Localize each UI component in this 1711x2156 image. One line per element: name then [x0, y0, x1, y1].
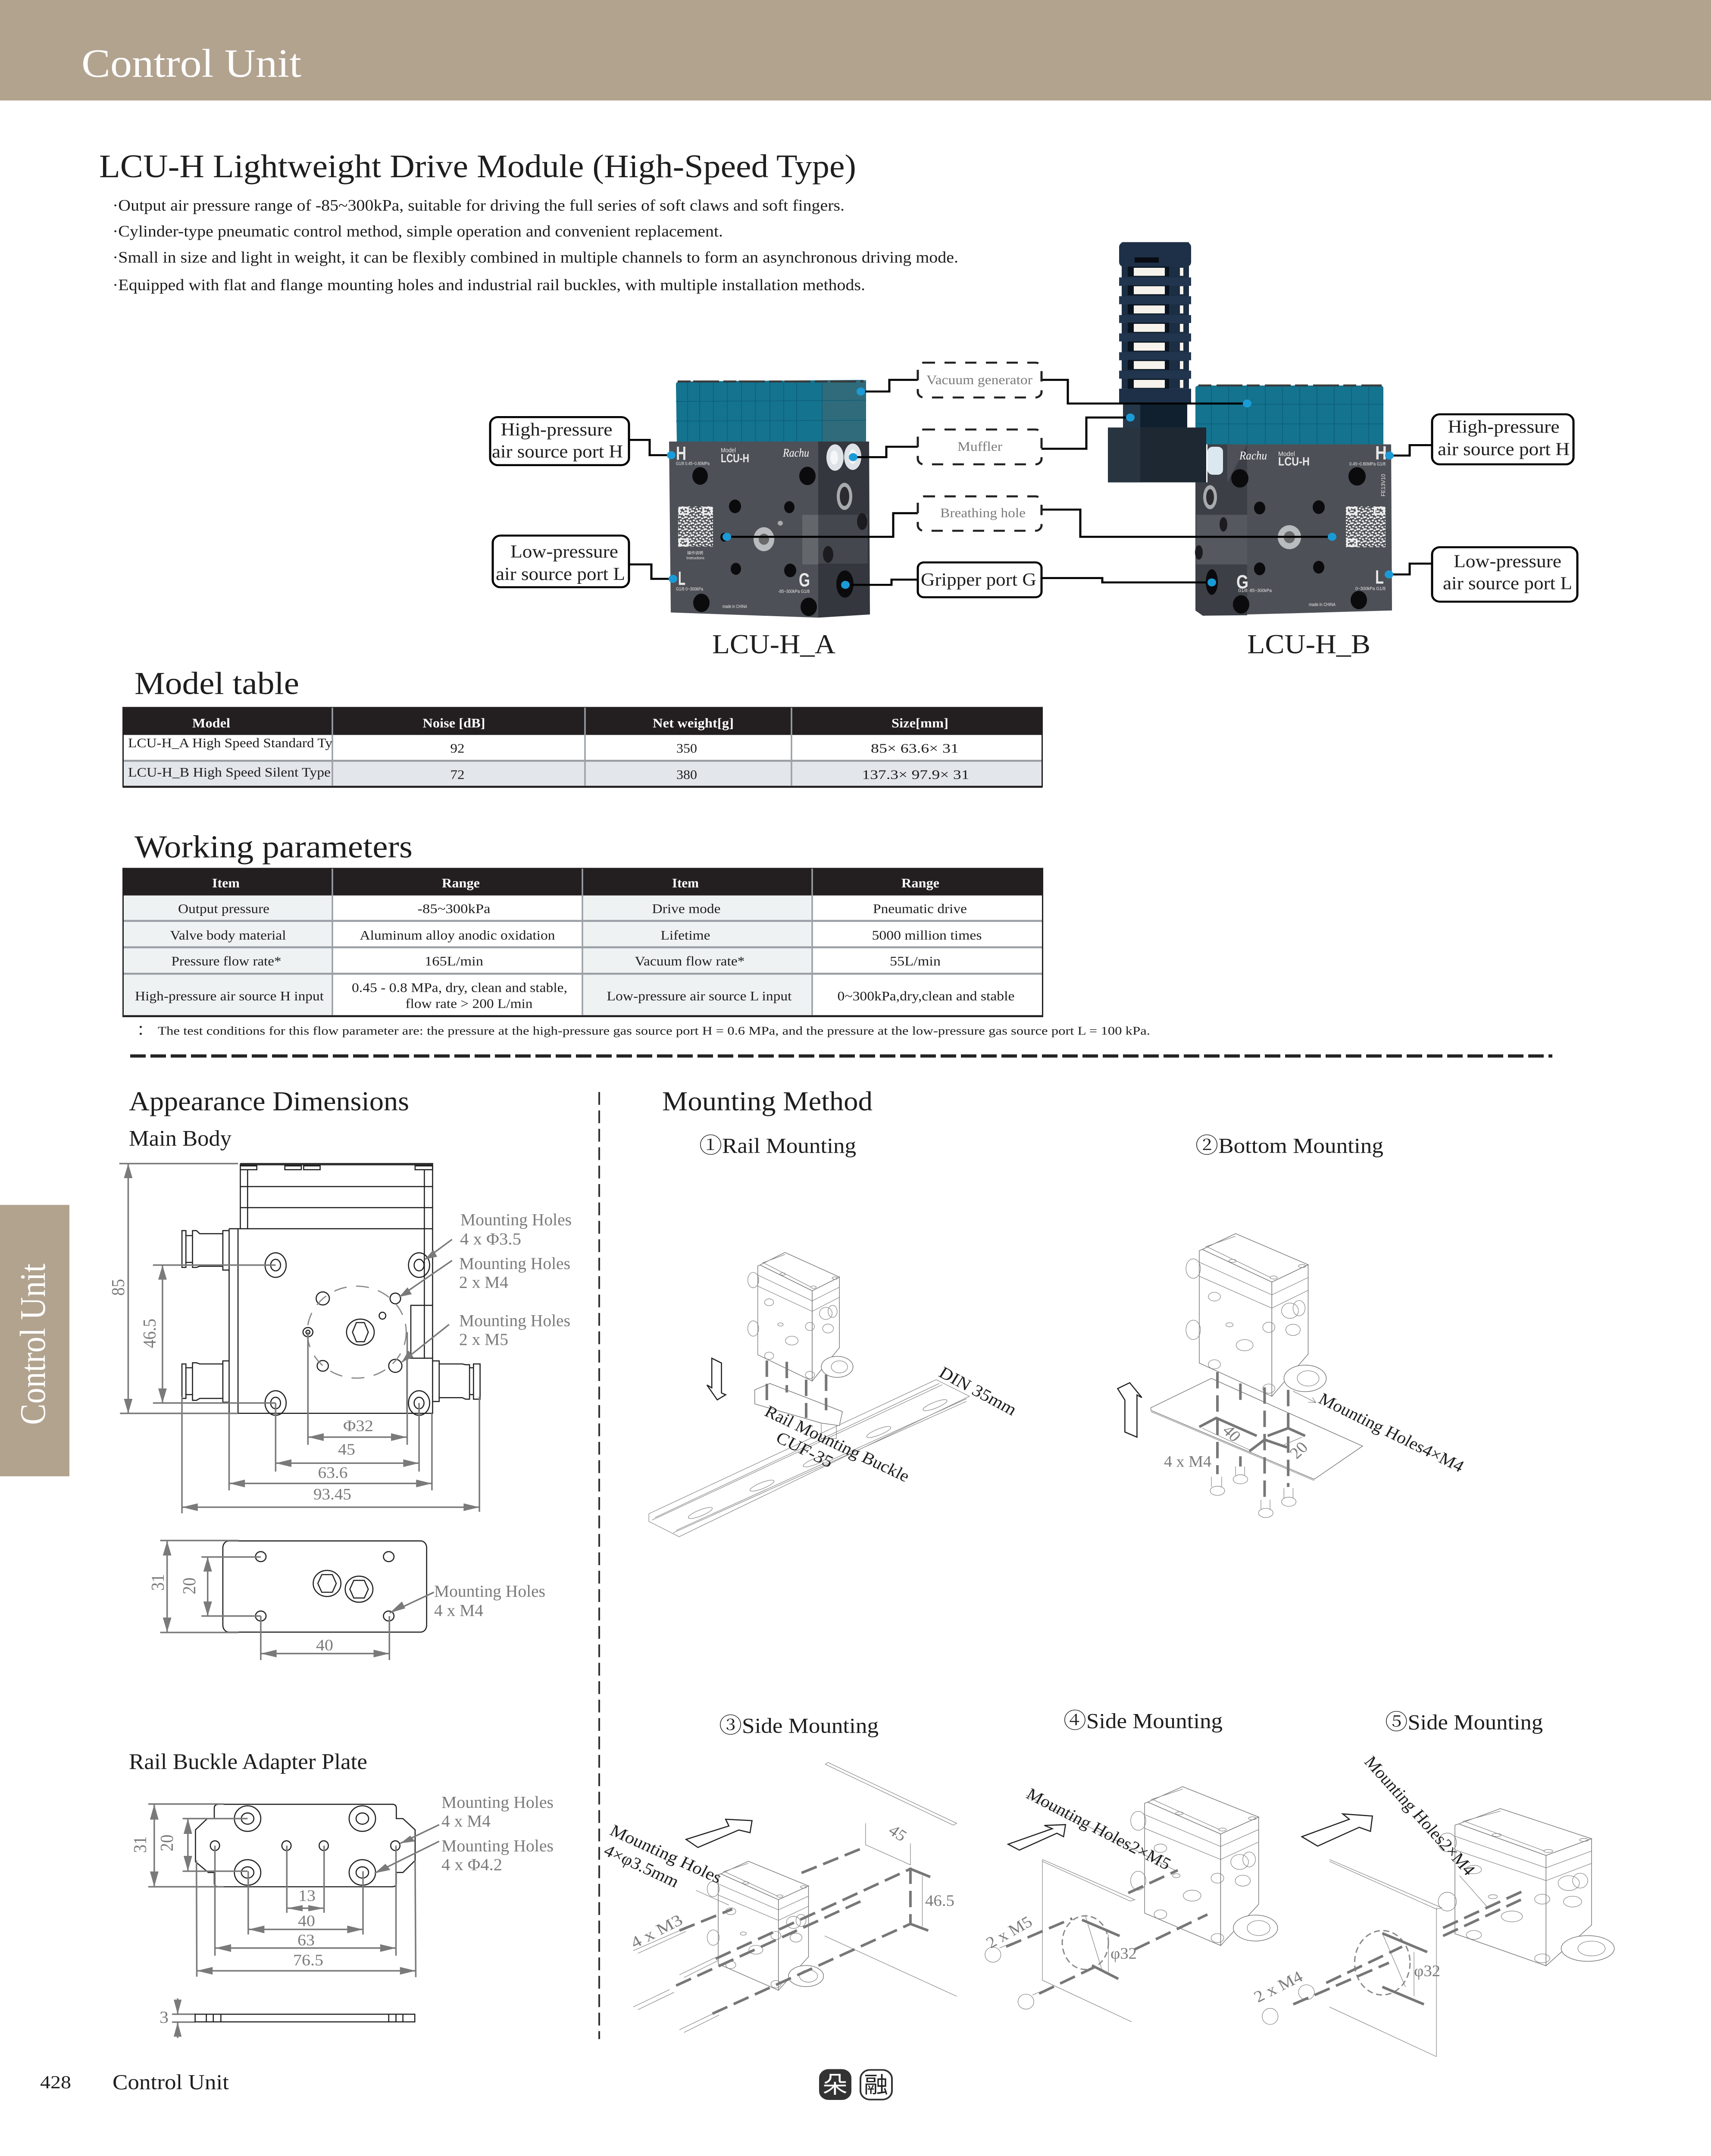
- row: output pressure: [178, 902, 967, 916]
- arrow: push in: [1008, 1825, 1066, 1850]
- drawing: main body front view: 45: [338, 1441, 355, 1458]
- feature list: [113, 197, 958, 294]
- arrow: push in: [686, 1819, 752, 1847]
- drawing: main body front view: Mounting Holes: [460, 1210, 572, 1229]
- page number: 428: [40, 2072, 71, 2093]
- product photo: LCU-H_B with muffler: 0~300kPa G1/8: [1355, 586, 1386, 591]
- product photo: LCU-H_A: [669, 380, 870, 617]
- callout: low-pressure port L (B): Low-pressure: [1454, 551, 1561, 571]
- side tab label: Control Unit: [13, 1263, 53, 1425]
- heading: side mounting 4: ④Side Mounting: [1064, 1709, 1223, 1733]
- product photo: LCU-H_B with muffler: [1108, 242, 1392, 616]
- footer logo: 融: [864, 2067, 888, 2100]
- diagram: side mounting 3: 45: [885, 1821, 910, 1845]
- footer logo: [819, 2066, 892, 2100]
- product title: LCU-H Lightweight Drive Module (High-Speed Type): [99, 149, 856, 185]
- side tab: [0, 1205, 69, 1476]
- product photo: LCU-H_A: G1/8 0~300kPa: [676, 587, 703, 592]
- product photo: LCU-H_B with muffler: H: [1375, 442, 1387, 464]
- row: LCU-H_A: [128, 736, 959, 755]
- diagram: side mounting 4: φ32: [1110, 1945, 1137, 1962]
- heading: rail buckle adapter plate: Rail Buckle Adapter Plate: [129, 1749, 367, 1774]
- diagram: rail mounting: [649, 1253, 1020, 1537]
- header row: [212, 876, 939, 890]
- product photo: LCU-H_B with muffler: FE13V10: [1380, 474, 1386, 496]
- working parameters table: [122, 868, 1043, 1017]
- drawing: rail buckle adapter plate: 31: [130, 1836, 150, 1853]
- product photo: LCU-H_A: G1/8 0.45~0.80MPa: [676, 461, 710, 467]
- row: flow rate: 165L/min: [425, 954, 483, 968]
- callout: vacuum generator: Vacuum generator: [926, 373, 1032, 387]
- callout: high-pressure port H (A): [490, 417, 671, 465]
- diagram: bottom mounting: 20: [1286, 1438, 1312, 1462]
- product photo: LCU-H_B with muffler: G1/8 -85~300kPa: [1238, 588, 1272, 593]
- drawing: main body front view: 46.5: [140, 1319, 160, 1348]
- row: LCU-H_A: 92: [450, 741, 465, 755]
- arrow: move down: [707, 1358, 726, 1400]
- product photo: LCU-H_B with muffler: Model: [1278, 451, 1295, 458]
- row: air source input: Low-pressure air source L input: [607, 989, 792, 1003]
- heading: working parameters: Working parameters: [135, 829, 413, 865]
- arrow: move up: [1118, 1383, 1142, 1437]
- row: flow rate: 55L/min: [890, 954, 941, 968]
- callout: high-pressure port H (A): High-pressure: [501, 419, 612, 440]
- row: air source input: High-pressure air source H input: [135, 989, 324, 1003]
- drawing: main body front view: 63.6: [318, 1464, 348, 1482]
- diagram: side mounting 3: 46.5: [925, 1892, 954, 1909]
- row: LCU-H_B: LCU-H_B High Speed Silent Type: [128, 765, 331, 780]
- diagram: side mounting 3: 4 x M3: [627, 1911, 686, 1952]
- product photo: LCU-H_A: made in CHINA: [723, 604, 747, 609]
- drawing: rail buckle adapter plate: 63: [297, 1932, 315, 1949]
- drawing: rail buckle adapter plate: 76.5: [293, 1952, 323, 1969]
- row: air source input: 0~300kPa,dry,clean and stable: [838, 989, 1015, 1003]
- header row: Model: [192, 716, 230, 730]
- callout: low-pressure port L (B): air source port L: [1443, 573, 1572, 593]
- product photo: LCU-H_A: G: [799, 569, 810, 591]
- row: LCU-H_B: [128, 765, 970, 782]
- drawing: rail buckle adapter plate: Mounting Holes: [441, 1836, 554, 1855]
- feature list: ·Cylinder-type pneumatic control method, simple operation and convenient replacement.: [113, 223, 723, 240]
- label: LCU-H_A: LCU-H_A: [712, 630, 835, 659]
- header row: [192, 716, 948, 730]
- row: output pressure: Pneumatic drive: [873, 902, 967, 916]
- drawing: rail buckle adapter plate: Mounting Holes: [441, 1793, 554, 1811]
- port marker dots: [667, 388, 1394, 589]
- drawing: main body front view: Mounting Holes: [459, 1311, 570, 1330]
- drawing: main body front view: 2 x M5: [459, 1330, 508, 1349]
- header row: Item: [672, 876, 699, 890]
- diagram: side mounting 3: Mounting Holes: [607, 1821, 725, 1887]
- footnote: [137, 1019, 1150, 1039]
- diagram: bottom mounting: [1118, 1234, 1467, 1517]
- drawing: main body front view: 85: [108, 1279, 128, 1296]
- model table: [122, 707, 1043, 788]
- callout: high-pressure port H (A): air source port H: [492, 441, 623, 462]
- drawing: rail buckle adapter plate: [130, 1793, 554, 2038]
- diagram: side mounting 3: [601, 1762, 957, 2033]
- row: valve body: Aluminum alloy anodic oxidation: [360, 928, 555, 943]
- callout: muffler: [853, 417, 1130, 464]
- callout: muffler: Muffler: [957, 439, 1002, 454]
- footer section name: Control Unit: [113, 2071, 229, 2094]
- product photo: LCU-H_A: L: [678, 567, 685, 589]
- drawing: main body bottom view: [148, 1541, 545, 1660]
- product photo: LCU-H_B with muffler: G: [1236, 571, 1248, 592]
- callout: low-pressure port L (A): air source port L: [496, 564, 625, 584]
- product photo: LCU-H_A: LCU-H: [721, 452, 749, 465]
- row: air source input: 0.45 - 0.8 MPa, dry, clean and stable,: [352, 980, 567, 995]
- callout: high-pressure port H (B): air source port H: [1438, 439, 1570, 459]
- feature list: ·Output air pressure range of -85~300kPa, suitable for driving the full series of soft claws and soft fingers.: [113, 197, 845, 214]
- callout: low-pressure port L (B): [1389, 547, 1577, 602]
- feature list: ·Equipped with flat and flange mounting holes and industrial rail buckles, with multiple installation methods.: [113, 276, 865, 294]
- header row: Item: [212, 876, 240, 890]
- drawing: main body bottom view: 31: [148, 1574, 168, 1591]
- header row: Range: [442, 876, 480, 890]
- header title: Control Unit: [81, 41, 301, 85]
- callout: high-pressure port H (B): High-pressure: [1448, 416, 1560, 437]
- diagram: rail mounting: Rail Mounting Buckle: [762, 1402, 913, 1485]
- product photo: LCU-H_A: Rachu: [782, 446, 809, 460]
- diagram: side mounting 3: 4×φ3.5mm: [601, 1841, 682, 1891]
- vacuum block: [1108, 403, 1206, 483]
- heading: side mounting 3: ③Side Mounting: [719, 1714, 879, 1738]
- heading: side mounting 5: ⑤Side Mounting: [1385, 1711, 1543, 1734]
- product photo: LCU-H_B with muffler: L: [1375, 566, 1384, 588]
- row: air source input: [135, 980, 1015, 1011]
- mounting plate: [1151, 1379, 1363, 1479]
- drawing: rail buckle adapter plate: 40: [298, 1912, 315, 1930]
- header row: Size[mm]: [891, 716, 948, 730]
- header row: Net weight[g]: [653, 716, 734, 730]
- row: flow rate: Pressure flow rate*: [172, 954, 282, 968]
- heading: main body: Main Body: [129, 1126, 231, 1150]
- callout: high-pressure port H (B): [1389, 414, 1573, 464]
- product photo: LCU-H_B with muffler: 0.45~0.80MPa G1/8: [1349, 462, 1386, 467]
- feature list: ·Small in size and light in weight, it can be flexibly combined in multiple channels to form an asynchronous driving mode.: [113, 249, 958, 266]
- drawing: main body front view: 4 x Φ3.5: [460, 1230, 521, 1248]
- callout: vacuum generator: [861, 363, 1247, 404]
- drawing: rail buckle adapter plate: 20: [157, 1835, 177, 1852]
- heading: rail mounting: ①Rail Mounting: [699, 1134, 856, 1158]
- diagram: side mounting 4: [983, 1784, 1278, 2022]
- arrow: push in: [1302, 1814, 1373, 1846]
- drawing: main body front view: 93.45: [313, 1486, 351, 1503]
- drawing: main body bottom view: Mounting Holes: [434, 1582, 545, 1601]
- drawing: main body front view: [108, 1163, 572, 1514]
- product photo: LCU-H_A: Instructions: [686, 556, 704, 561]
- diagram: side mounting 5: φ32: [1414, 1962, 1440, 1980]
- row: LCU-H_A: 350: [676, 741, 697, 755]
- drawing: rail buckle adapter plate: 4 x M4: [441, 1811, 491, 1830]
- product photo: LCU-H_A: Model: [721, 447, 736, 454]
- diagram: rail mounting: DIN 35mm: [935, 1363, 1020, 1419]
- callout: gripper port G: [845, 562, 1212, 597]
- row: LCU-H_B: 72: [450, 768, 465, 782]
- header row: Range: [901, 876, 939, 890]
- row: air source input: flow rate > 200 L/min: [406, 997, 533, 1011]
- product photo: LCU-H_A: -85~300kPa G1/8: [778, 589, 810, 594]
- header band: [0, 0, 1711, 100]
- row: LCU-H_A: LCU-H_A High Speed Standard Ty: [128, 736, 332, 750]
- diagram: bottom mounting: 40: [1219, 1422, 1244, 1445]
- row: output pressure: Drive mode: [652, 902, 721, 916]
- row: valve body: Valve body material: [170, 928, 286, 943]
- heading: bottom mounting: ②Bottom Mounting: [1195, 1134, 1383, 1158]
- row: flow rate: [172, 954, 941, 968]
- row: output pressure: -85~300kPa: [418, 902, 491, 916]
- heading: model table: Model table: [135, 665, 299, 701]
- drawing: main body bottom view: 20: [179, 1578, 199, 1595]
- drawing: rail buckle adapter plate: 3: [160, 2008, 169, 2027]
- footnote: ：: [137, 1019, 152, 1039]
- row: LCU-H_B: 380: [676, 768, 697, 782]
- drawing: main body front view: 2 x M4: [459, 1273, 508, 1291]
- drawing: rail buckle adapter plate: 13: [298, 1887, 316, 1905]
- product photo: LCU-H_A: H: [676, 442, 686, 464]
- diagram: side mounting 4: 2 x M5: [983, 1913, 1035, 1952]
- diagram: side mounting 4: Mounting Holes2×M5: [1023, 1784, 1174, 1874]
- callout: low-pressure port L (A): [493, 536, 673, 587]
- callout: low-pressure port L (A): Low-pressure: [510, 541, 618, 562]
- drawing: main body front view: Φ32: [343, 1417, 373, 1435]
- row: LCU-H_B: 137.3× 97.9× 31: [862, 768, 970, 782]
- muffler: [1119, 242, 1191, 403]
- label: LCU-H_B: LCU-H_B: [1247, 630, 1370, 659]
- callout: breathing hole: [727, 496, 1332, 537]
- diagram: side mounting 5: 2 x M4: [1251, 1968, 1306, 2006]
- footnote: The test conditions for this flow parameter are: the pressure at the high-pressure gas source port H = 0.6 MPa, and the pressure at the low-pressure gas source port L = 100 kPa.: [158, 1025, 1150, 1037]
- callout: breathing hole: Breathing hole: [940, 505, 1026, 520]
- drawing: main body front view: Mounting Holes: [459, 1254, 570, 1272]
- row: valve body: [170, 928, 982, 943]
- adapter plate: [755, 1383, 842, 1426]
- header row: Noise [dB]: [423, 716, 485, 730]
- row: output pressure: Output pressure: [178, 902, 269, 916]
- heading: appearance dimensions: Appearance Dimensions: [129, 1087, 409, 1117]
- diagram: side mounting 5: Mounting Holes2×M4: [1361, 1752, 1479, 1879]
- diagram: bottom mounting: Mounting Holes4×M4: [1316, 1389, 1467, 1476]
- row: flow rate: Vacuum flow rate*: [635, 954, 745, 968]
- row: valve body: 5000 million times: [872, 928, 982, 943]
- drawing: rail buckle adapter plate: 4 x Φ4.2: [441, 1855, 502, 1874]
- row: valve body: Lifetime: [660, 928, 710, 943]
- drawing: main body bottom view: 40: [316, 1637, 333, 1654]
- footer logo: 朵: [823, 2066, 848, 2100]
- product photo: LCU-H_B with muffler: LCU-H: [1278, 455, 1310, 468]
- heading: mounting method: Mounting Method: [662, 1087, 873, 1117]
- product photo: LCU-H_B with muffler: made in CHINA: [1309, 602, 1336, 607]
- din rail: [649, 1380, 970, 1537]
- product photo: LCU-H_A: 操作说明: [687, 551, 703, 556]
- product photo: LCU-H_B with muffler: Rachu: [1239, 449, 1267, 462]
- diagram: bottom mounting: 4 x M4: [1164, 1453, 1211, 1470]
- diagram: rail mounting: CUF-35: [773, 1428, 837, 1471]
- callout: gripper port G: Gripper port G: [921, 569, 1036, 590]
- drawing: main body bottom view: 4 x M4: [434, 1601, 483, 1620]
- row: LCU-H_A: 85× 63.6× 31: [871, 741, 959, 755]
- diagram: side mounting 5: [1251, 1752, 1614, 2057]
